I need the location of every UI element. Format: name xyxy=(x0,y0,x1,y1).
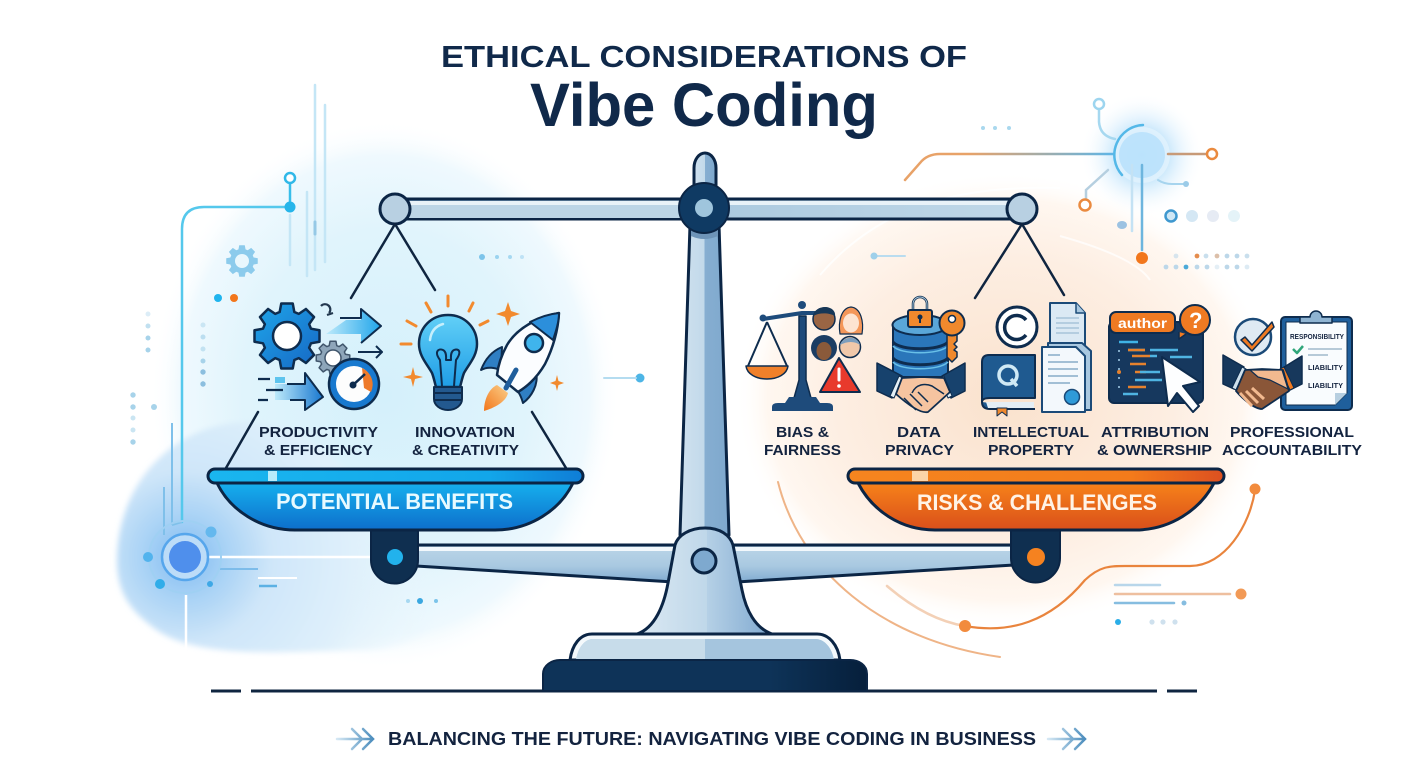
ground line xyxy=(211,690,1197,692)
pan bracket xyxy=(1011,528,1060,582)
right labels: INTELLECTUAL xyxy=(973,424,1089,441)
top beam xyxy=(395,199,1022,219)
icon: professional accountability xyxy=(1223,311,1352,410)
icon: attribution and ownership xyxy=(1109,305,1210,412)
right labels: BIAS & xyxy=(776,424,829,441)
pan label: POTENTIAL BENEFITS xyxy=(276,489,513,514)
left labels: & EFFICIENCY xyxy=(264,442,373,459)
left circuit decoration xyxy=(130,85,645,604)
clipboard text: LIABILITY xyxy=(1308,383,1343,390)
icon: data privacy xyxy=(877,297,965,412)
right labels: ATTRIBUTION xyxy=(1101,424,1209,441)
left labels: INNOVATION xyxy=(415,424,515,441)
hub xyxy=(679,183,729,233)
title: Vibe Coding xyxy=(530,71,878,139)
pedestal neck xyxy=(637,528,772,634)
right labels: FAIRNESS xyxy=(764,442,841,459)
footer tagline: BALANCING THE FUTURE: NAVIGATING VIBE CODING IN BUSINESS xyxy=(388,729,1036,749)
right pan: risks and challenges xyxy=(848,469,1224,582)
left labels xyxy=(259,424,519,459)
lower arm xyxy=(416,545,1014,583)
lower left node xyxy=(143,423,385,650)
right labels: PROPERTY xyxy=(988,442,1074,459)
author tag text: author xyxy=(1118,315,1168,331)
balance scale xyxy=(380,153,1037,691)
background glows xyxy=(117,93,1275,670)
icon: small decorative gear xyxy=(226,245,258,277)
scale post xyxy=(680,153,729,535)
icon: innovation and creativity xyxy=(401,296,564,411)
clipboard text xyxy=(1290,334,1344,390)
pan label: RISKS & CHALLENGES xyxy=(917,490,1157,515)
question mark: ? xyxy=(1189,308,1202,333)
arrow: left chevrons xyxy=(337,729,373,749)
right labels: PROFESSIONAL xyxy=(1230,424,1354,441)
right labels: & OWNERSHIP xyxy=(1097,442,1212,459)
right labels: PRIVACY xyxy=(885,442,954,459)
scale strings xyxy=(226,224,1064,468)
icon: bias and fairness xyxy=(746,301,863,411)
right circuit decoration xyxy=(870,99,1249,269)
clipboard text: RESPONSIBILITY xyxy=(1290,334,1344,341)
beam end balls xyxy=(380,194,1037,224)
icon: intellectual property xyxy=(982,303,1091,416)
orange curves decoration xyxy=(778,482,1260,657)
icon: productivity and efficiency xyxy=(254,303,382,410)
right labels: DATA xyxy=(897,424,941,441)
pan bracket xyxy=(371,528,418,584)
left pan: potential benefits xyxy=(208,469,583,584)
right labels: ACCOUNTABILITY xyxy=(1222,442,1362,459)
right labels xyxy=(764,424,1362,459)
arrow: right chevrons xyxy=(1048,729,1085,749)
pedestal base xyxy=(543,634,867,691)
title: ETHICAL CONSIDERATIONS OF xyxy=(441,39,967,74)
left labels: PRODUCTIVITY xyxy=(259,424,378,441)
clipboard text: LIABILITY xyxy=(1308,365,1343,372)
title xyxy=(441,39,967,139)
left labels: & CREATIVITY xyxy=(412,442,519,459)
